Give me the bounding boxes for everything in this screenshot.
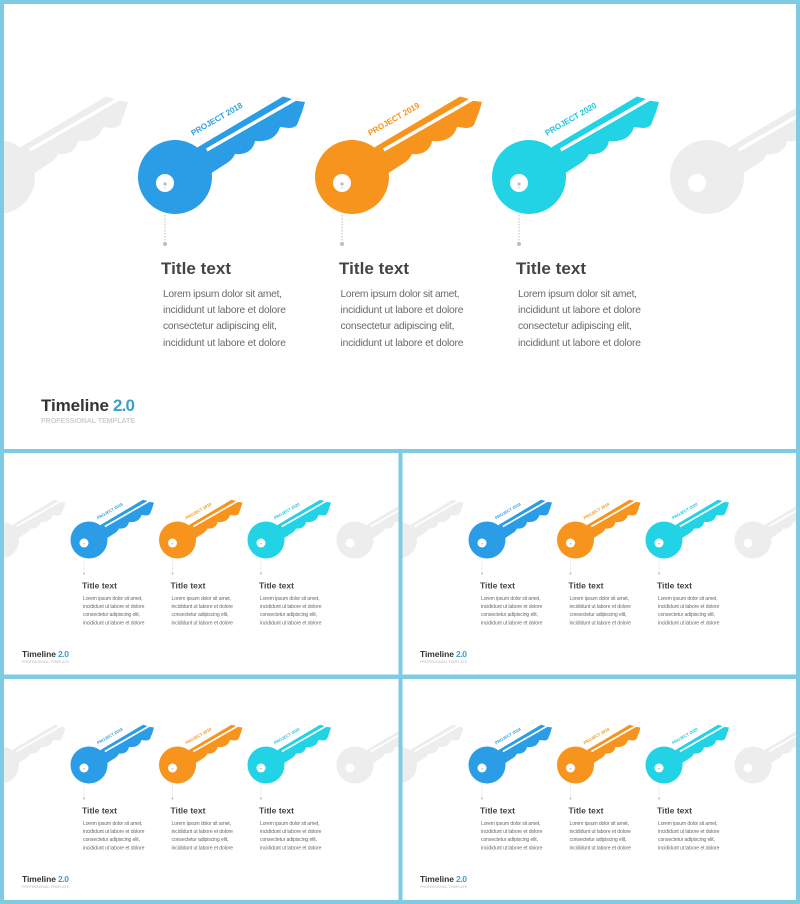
- title: Timeline 2.0: PROFESSIONAL TEMPLATE: [22, 660, 70, 664]
- title: Timeline 2.0: 2.0: [456, 874, 467, 884]
- text blocks: columns: Lorem ipsum dolor sit amet,: [260, 821, 320, 827]
- text block: column 3: consectetur adipiscing elit,: [518, 321, 632, 332]
- text blocks: columns: consectetur adipiscing elit,: [260, 612, 317, 618]
- text blocks: columns: incididunt ut labore et dolore: [172, 604, 233, 610]
- title: Timeline 2.0: PROFESSIONAL TEMPLATE: [41, 416, 135, 425]
- icon: grey key left: [0, 96, 128, 214]
- text blocks: columns: Title text: [259, 806, 294, 816]
- icon: coloured keys: [468, 725, 729, 800]
- text block: column 3: [516, 259, 641, 349]
- title: Timeline 2.0: 2.0: [58, 649, 69, 659]
- text block: column 1: [161, 259, 286, 349]
- text blocks: columns: incididunt ut labore et dolore: [83, 620, 145, 626]
- text block: column 2: incididunt ut labore et dolore: [340, 338, 464, 349]
- text blocks: columns: Title text: [657, 806, 692, 816]
- text block: column 3: Title text: [516, 259, 586, 278]
- text blocks: columns: consectetur adipiscing elit,: [570, 612, 626, 618]
- text blocks: columns: Lorem ipsum dolor sit amet,: [570, 821, 629, 827]
- text blocks: columns: incididunt ut labore et dolore: [83, 604, 145, 610]
- text block: column 1: Lorem ipsum dolor sit amet,: [163, 289, 282, 300]
- label: project 2018: PROJECT 2018: [190, 101, 245, 138]
- text blocks: columns: Title text: [82, 580, 117, 590]
- title: Timeline 2.0: [22, 876, 69, 888]
- icon: grey keys: [380, 725, 800, 784]
- text blocks: columns: Lorem ipsum dolor sit amet,: [570, 596, 629, 602]
- text block: column 2: Title text: [339, 259, 409, 278]
- text blocks: columns: Title text: [170, 806, 206, 816]
- text blocks: columns: [480, 580, 720, 626]
- text blocks: columns: incididunt ut labore et dolore: [658, 604, 720, 610]
- labels: projects: [96, 728, 300, 744]
- text blocks: columns: incididunt ut labore et dolore: [83, 829, 145, 835]
- text block: column 2: incididunt ut labore et dolore: [340, 305, 464, 316]
- panel: thumbnail bottom left: [0, 725, 420, 889]
- title: Timeline 2.0: [41, 399, 135, 423]
- title: Timeline 2.0: [420, 876, 467, 888]
- text blocks: columns: incididunt ut labore et dolore: [260, 829, 322, 835]
- icon: cyan key: [492, 96, 659, 246]
- panel: thumbnail bottom right: [380, 725, 800, 889]
- text block: column 3: incididunt ut labore et dolore: [518, 338, 641, 349]
- title: Timeline 2.0: Timeline: [420, 874, 454, 884]
- text blocks: columns: incididunt ut labore et dolore: [481, 604, 543, 610]
- panel: main slide: [0, 96, 800, 425]
- labels: projects: PROJECT 2018: [96, 501, 124, 520]
- text blocks: columns: Lorem ipsum dolor sit amet,: [172, 821, 231, 827]
- text blocks: columns: Lorem ipsum dolor sit amet,: [481, 821, 540, 827]
- labels: projects: PROJECT 2020: [671, 501, 699, 520]
- text blocks: columns: Title text: [82, 806, 117, 816]
- text blocks: columns: Lorem ipsum dolor sit amet,: [658, 821, 718, 827]
- text blocks: columns: incididunt ut labore et dolore: [83, 846, 145, 852]
- text block: column 2: Lorem ipsum dolor sit amet,: [340, 289, 460, 300]
- icon: coloured keys: [70, 725, 331, 800]
- labels: projects: PROJECT 2018: [494, 726, 522, 745]
- text blocks: columns: Lorem ipsum dolor sit amet,: [658, 596, 718, 602]
- title: Timeline 2.0: Timeline: [41, 396, 109, 415]
- text blocks: columns: Lorem ipsum dolor sit amet,: [172, 596, 231, 602]
- text blocks: columns: incididunt ut labore et dolore: [260, 846, 322, 852]
- text blocks: columns: incididunt ut labore et dolore: [172, 846, 233, 852]
- title: Timeline 2.0: Timeline: [420, 649, 454, 659]
- text blocks: columns: incididunt ut labore et dolore: [570, 829, 631, 835]
- text blocks: columns: incididunt ut labore et dolore: [260, 620, 322, 626]
- title: Timeline 2.0: 2.0: [113, 396, 135, 415]
- labels: projects: [96, 502, 300, 520]
- text blocks: columns: Lorem ipsum dolor sit amet,: [260, 596, 320, 602]
- icon: grey keys: [0, 500, 420, 558]
- icon: coloured keys: [468, 500, 729, 574]
- text blocks: columns: consectetur adipiscing elit,: [658, 612, 715, 618]
- text blocks: columns: Lorem ipsum dolor sit amet,: [83, 596, 142, 602]
- text blocks: columns: incididunt ut labore et dolore: [172, 829, 233, 835]
- text blocks: columns: consectetur adipiscing elit,: [481, 837, 538, 843]
- text blocks: columns: consectetur adipiscing elit,: [83, 612, 140, 618]
- icon: blue key: [138, 96, 305, 246]
- labels: projects: [494, 502, 698, 520]
- text block: column 1: incididunt ut labore et dolore: [163, 305, 286, 316]
- labels: projects: [494, 728, 698, 744]
- text block: column 2: [339, 259, 464, 349]
- text block: column 1: consectetur adipiscing elit,: [163, 321, 277, 332]
- text blocks: columns: incididunt ut labore et dolore: [570, 846, 631, 852]
- text blocks: columns: consectetur adipiscing elit,: [260, 837, 317, 843]
- text blocks: columns: Lorem ipsum dolor sit amet,: [481, 596, 540, 602]
- text blocks: columns: [82, 806, 322, 852]
- labels: projects: PROJECT 2019: [582, 726, 611, 745]
- labels: projects: PROJECT 2019: [184, 726, 213, 745]
- label: project 2019: PROJECT 2019: [366, 101, 422, 138]
- panel: thumbnail top right: [380, 500, 800, 664]
- text block: column 1: Title text: [161, 259, 231, 278]
- text blocks: columns: Title text: [170, 580, 206, 590]
- text blocks: columns: consectetur adipiscing elit,: [658, 837, 715, 843]
- icon: coloured keys: [70, 500, 331, 574]
- panel: thumbnail top left: [0, 500, 420, 664]
- labels: projects: PROJECT 2020: [273, 726, 301, 745]
- icon: grey key right: [670, 108, 796, 214]
- title: Timeline 2.0: Timeline: [22, 874, 56, 884]
- icon: grey keys: [0, 725, 420, 784]
- text blocks: columns: Lorem ipsum dolor sit amet,: [83, 821, 142, 827]
- labels: projects: PROJECT 2018: [494, 501, 522, 520]
- text blocks: columns: consectetur adipiscing elit,: [481, 612, 538, 618]
- label: project 2020: PROJECT 2020: [544, 101, 599, 138]
- text blocks: columns: incididunt ut labore et dolore: [570, 620, 631, 626]
- title: Timeline 2.0: PROFESSIONAL TEMPLATE: [420, 660, 468, 664]
- labels: projects: PROJECT 2019: [582, 501, 611, 520]
- text blocks: columns: incididunt ut labore et dolore: [658, 620, 720, 626]
- title: Timeline 2.0: PROFESSIONAL TEMPLATE: [22, 885, 70, 889]
- text blocks: columns: incididunt ut labore et dolore: [481, 620, 543, 626]
- text blocks: columns: incididunt ut labore et dolore: [481, 829, 543, 835]
- text blocks: columns: Title text: [568, 806, 604, 816]
- text blocks: columns: consectetur adipiscing elit,: [83, 837, 140, 843]
- text blocks: columns: incididunt ut labore et dolore: [658, 829, 720, 835]
- text blocks: columns: [82, 580, 322, 626]
- title: Timeline 2.0: Timeline: [22, 649, 56, 659]
- text blocks: columns: incididunt ut labore et dolore: [260, 604, 322, 610]
- text blocks: columns: Title text: [480, 580, 515, 590]
- labels: projects: PROJECT 2020: [273, 501, 301, 520]
- text block: column 3: Lorem ipsum dolor sit amet,: [518, 289, 637, 300]
- text blocks: columns: [480, 806, 720, 852]
- title: Timeline 2.0: 2.0: [58, 874, 69, 884]
- text blocks: columns: consectetur adipiscing elit,: [172, 837, 228, 843]
- text blocks: columns: consectetur adipiscing elit,: [172, 612, 228, 618]
- text blocks: columns: incididunt ut labore et dolore: [172, 620, 233, 626]
- title: Timeline 2.0: PROFESSIONAL TEMPLATE: [420, 885, 468, 889]
- text blocks: columns: Title text: [480, 806, 515, 816]
- text block: column 3: incididunt ut labore et dolore: [518, 305, 641, 316]
- labels: projects: PROJECT 2020: [671, 726, 699, 745]
- icon: grey keys: [380, 500, 800, 558]
- text blocks: columns: Title text: [568, 580, 604, 590]
- title: Timeline 2.0: 2.0: [456, 649, 467, 659]
- text blocks: columns: incididunt ut labore et dolore: [658, 846, 720, 852]
- text blocks: columns: Title text: [259, 580, 294, 590]
- labels: projects: PROJECT 2018: [96, 726, 124, 745]
- labels: projects: PROJECT 2019: [184, 501, 213, 520]
- text blocks: columns: consectetur adipiscing elit,: [570, 837, 626, 843]
- title: Timeline 2.0: [420, 651, 467, 663]
- text block: column 1: incididunt ut labore et dolore: [163, 338, 286, 349]
- text block: column 2: consectetur adipiscing elit,: [340, 321, 454, 332]
- title: Timeline 2.0: [22, 651, 69, 663]
- text blocks: columns: incididunt ut labore et dolore: [481, 846, 543, 852]
- text blocks: columns: incididunt ut labore et dolore: [570, 604, 631, 610]
- text blocks: columns: Title text: [657, 580, 692, 590]
- icon: orange key: [315, 96, 482, 246]
